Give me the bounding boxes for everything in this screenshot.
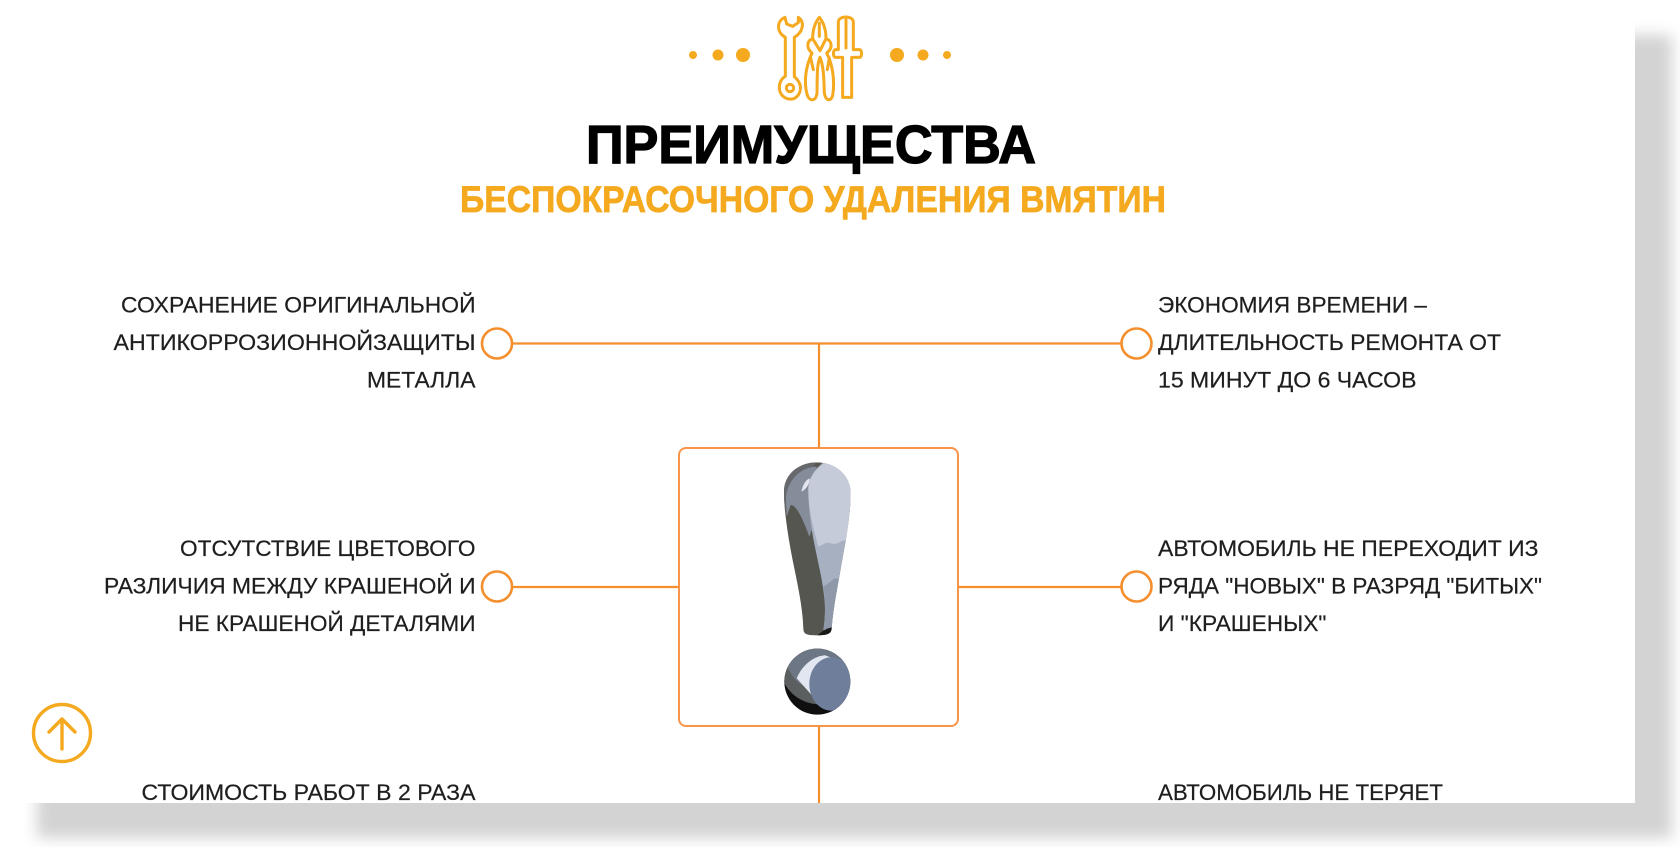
text: middle left: РАЗЛИЧИЯ МЕЖДУ КРАШЕНОЙ И	[104, 574, 475, 598]
node: top left	[482, 328, 512, 358]
text: middle right: И "КРАШЕНЫХ"	[1158, 611, 1326, 636]
dots right	[890, 48, 951, 62]
text: top right: 15 МИНУТ ДО 6 ЧАСОВ	[1158, 368, 1416, 392]
text: top left: СОХРАНЕНИЕ ОРИГИНАЛЬНОЙ	[121, 292, 476, 318]
icon: tools with dots	[689, 17, 951, 100]
title: ПРЕИМУЩЕСТВА	[586, 115, 1036, 175]
text: middle right: АВТОМОБИЛЬ НЕ ПЕРЕХОДИТ ИЗ	[1158, 536, 1538, 561]
dots left	[689, 48, 750, 62]
node: middle right	[1122, 572, 1152, 602]
text: middle right	[1158, 536, 1542, 636]
text: top right: ЭКОНОМИЯ ВРЕМЕНИ –	[1158, 292, 1428, 318]
connector lines	[512, 344, 1122, 803]
icon: scroll to top arrow	[34, 704, 90, 762]
node: middle left	[482, 572, 512, 602]
text: top right: ДЛИТЕЛЬНОСТЬ РЕМОНТА ОТ	[1158, 330, 1501, 355]
text: middle left: НЕ КРАШЕНОЙ ДЕТАЛЯМИ	[178, 611, 476, 636]
text: top left	[114, 292, 476, 392]
text: middle right: РЯДА "НОВЫХ" В РАЗРЯД "БИТЫХ"	[1158, 574, 1542, 598]
text: top left: МЕТАЛЛА	[367, 368, 476, 392]
text: middle left: ОТСУТСТВИЕ ЦВЕТОВОГО	[180, 536, 476, 561]
node: top right	[1122, 328, 1152, 358]
subtitle: БЕСПОКРАСОЧНОГО УДАЛЕНИЯ ВМЯТИН	[460, 179, 1166, 220]
text: top left: АНТИКОРРОЗИОННОЙЗАЩИТЫ	[114, 330, 476, 355]
icon: silver exclamation mark	[784, 462, 851, 715]
text: middle left	[104, 536, 476, 636]
center box	[679, 448, 958, 726]
icon: wrench, pliers, screwdriver	[779, 17, 862, 100]
text: top right	[1158, 292, 1501, 392]
